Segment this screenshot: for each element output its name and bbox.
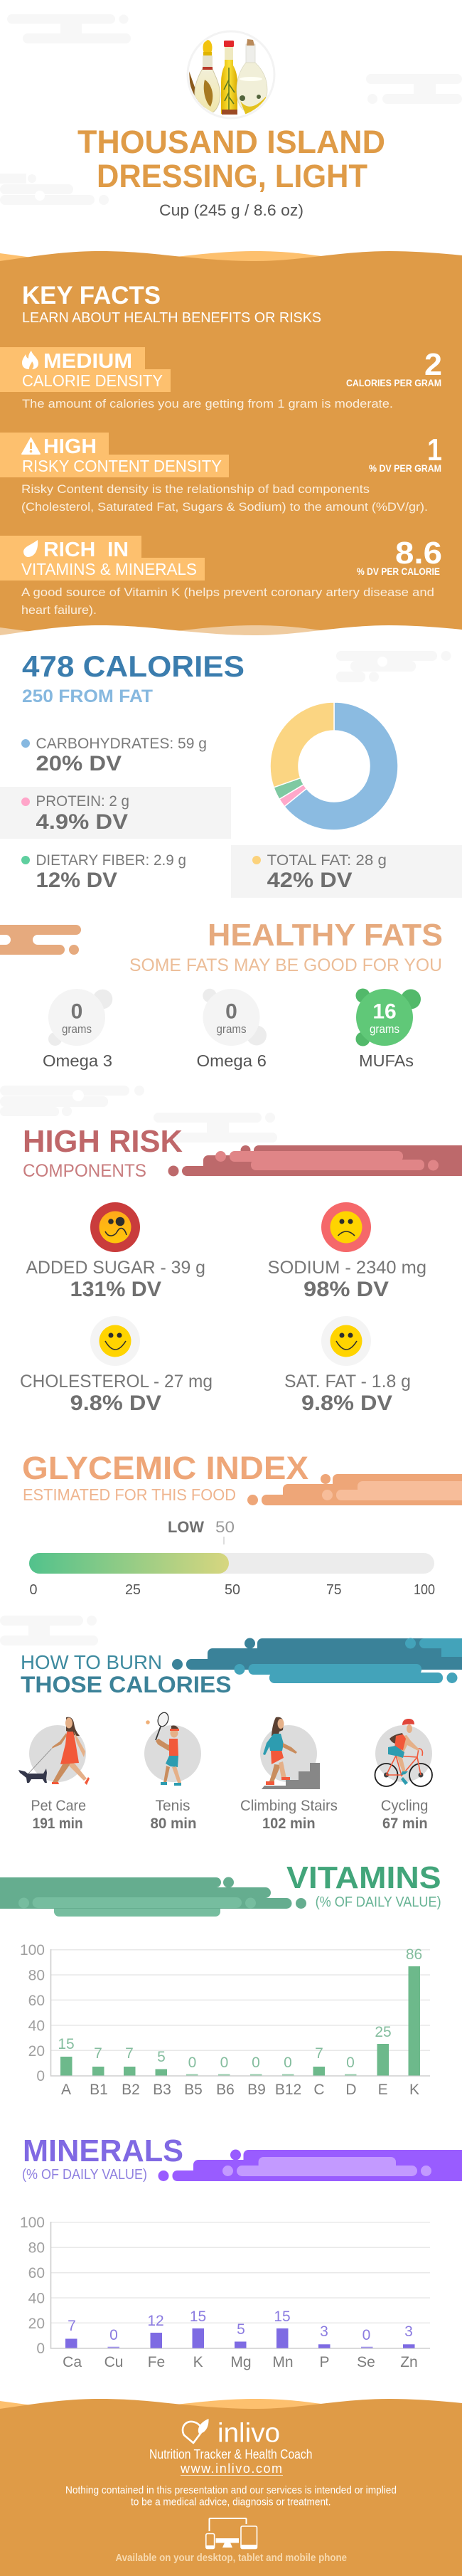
bar chart: minerals: Cu bbox=[104, 2354, 123, 2370]
bar chart: minerals: 5 bbox=[237, 2321, 245, 2338]
activity: climbing stairs bbox=[240, 1717, 338, 1832]
icon: devices bbox=[206, 2518, 257, 2548]
metric: MUFAs: MUFAs bbox=[359, 1051, 414, 1070]
bar chart: vitamins: 86 bbox=[406, 1946, 422, 1963]
metric: MUFAs: 16 bbox=[372, 1000, 397, 1023]
legend: carbohydrates: CARBOHYDRATES: 59 g bbox=[36, 736, 207, 752]
legend: carbohydrates: 20% DV bbox=[36, 752, 122, 775]
activity: tennis: Tenis bbox=[155, 1798, 190, 1814]
panel: glycemic index bbox=[22, 1450, 462, 1598]
availability note: Available on your desktop, tablet and mobile phone bbox=[115, 2552, 347, 2564]
icon: warning triangle bbox=[21, 437, 41, 455]
bar chart: vitamins: 0 bbox=[36, 2068, 45, 2084]
metric: omega 3: Omega 3 bbox=[43, 1051, 112, 1070]
activity: cycling: 67 min bbox=[382, 1816, 428, 1832]
fact: calorie density: The amount of calories you are getting from 1 gram is moderate. bbox=[22, 397, 393, 410]
fact: rich in vitamins and minerals: heart failure). bbox=[21, 603, 97, 617]
icon: flame bbox=[22, 351, 38, 369]
bar chart: minerals: P bbox=[319, 2354, 330, 2370]
bar chart: minerals: 40 bbox=[28, 2291, 45, 2306]
bar chart: minerals: 15 bbox=[190, 2309, 206, 2325]
bar chart: vitamins: 7 bbox=[125, 2045, 134, 2062]
healthy fats heading: HEALTHY FATS bbox=[208, 918, 443, 953]
legend: dietary fiber: 12% DV bbox=[36, 869, 117, 892]
glycemic value label bbox=[168, 1518, 235, 1544]
disclaimer bbox=[65, 2484, 397, 2508]
calories heading: 478 CALORIES bbox=[22, 650, 245, 683]
food photo: oil and dressing bottles in round frame bbox=[188, 31, 274, 120]
bar chart: vitamins: A bbox=[61, 2082, 71, 2098]
glycemic scale: 0 bbox=[30, 1582, 37, 1598]
disclaimer: Nothing contained in this presentation and our services is intended or implied bbox=[65, 2484, 397, 2496]
activity: pet care bbox=[18, 1717, 90, 1832]
panel: minerals bbox=[20, 2134, 462, 2370]
legend: total fat: 42% DV bbox=[267, 869, 353, 892]
fact: rich in vitamins and minerals: A good source of Vitamin K (helps prevent coronary artery disease and bbox=[21, 585, 434, 599]
decorative cloud: vitamins bbox=[0, 1877, 306, 1917]
risk: cholesterol bbox=[20, 1316, 213, 1415]
minerals subheading: (% OF DAILY VALUE) bbox=[22, 2167, 147, 2183]
bar chart: minerals: 80 bbox=[28, 2240, 45, 2257]
activity: pet care: Pet Care bbox=[31, 1798, 86, 1814]
fact: risky content density: 1 bbox=[427, 433, 442, 467]
risk: saturated fat: SAT. FAT - 1.8 g bbox=[284, 1372, 411, 1392]
bar chart: vitamins: E bbox=[378, 2082, 388, 2098]
bar chart: minerals: Fe bbox=[148, 2354, 165, 2370]
fact: risky content density: Risky Content density is the relationship of bad components bbox=[21, 482, 370, 496]
risk: added sugar: ADDED SUGAR - 39 g bbox=[26, 1258, 205, 1278]
glycemic scale bbox=[30, 1582, 435, 1598]
bar chart: vitamins: B1 bbox=[90, 2082, 108, 2098]
icon: inlivo heart logo bbox=[183, 2419, 209, 2443]
activity: tennis bbox=[144, 1711, 201, 1832]
activity: climbing stairs: 102 min bbox=[262, 1816, 316, 1832]
panel: healthy fats bbox=[0, 918, 443, 1070]
high risk heading: HIGH RISK bbox=[23, 1124, 183, 1159]
activity: cycling: Cycling bbox=[381, 1798, 428, 1814]
risk: sodium bbox=[267, 1202, 426, 1301]
bar chart: vitamins: 15 bbox=[58, 2036, 75, 2052]
panel: key facts bbox=[0, 251, 462, 639]
bar chart: vitamins: 7 bbox=[315, 2045, 323, 2062]
bar chart: minerals: K bbox=[193, 2354, 203, 2370]
bar chart: vitamins: 25 bbox=[375, 2024, 392, 2040]
bar chart: minerals: 3 bbox=[404, 2323, 413, 2340]
bar chart: vitamins: 60 bbox=[28, 1993, 45, 2009]
title: THOUSAND ISLAND bbox=[77, 124, 385, 160]
bar chart: minerals: 0 bbox=[109, 2327, 118, 2343]
tagline: Nutrition Tracker & Health Coach bbox=[149, 2447, 313, 2461]
legend: carbohydrates bbox=[21, 736, 207, 775]
bar chart: vitamins: 0 bbox=[252, 2055, 260, 2071]
bar chart: minerals: 60 bbox=[28, 2265, 45, 2281]
activity: climbing stairs: Climbing Stairs bbox=[240, 1798, 338, 1814]
metric: omega 6: Omega 6 bbox=[196, 1051, 267, 1070]
bar chart: vitamins: B9 bbox=[247, 2082, 266, 2098]
metric: MUFAs bbox=[355, 989, 421, 1070]
bar chart: vitamins: 0 bbox=[188, 2055, 196, 2071]
metric: omega 6 bbox=[196, 989, 267, 1070]
key facts heading: KEY FACTS bbox=[22, 282, 161, 309]
bar chart: minerals: 0 bbox=[362, 2327, 370, 2343]
decorative cloud: above burn bbox=[0, 1616, 98, 1645]
fact: risky content density: HIGH bbox=[43, 435, 97, 458]
fact: calorie density: 2 bbox=[424, 347, 442, 382]
bar chart: minerals: 7 bbox=[68, 2318, 76, 2334]
bar chart: minerals: 12 bbox=[147, 2313, 164, 2329]
fact: calorie density bbox=[0, 347, 442, 410]
brand name: inlivo bbox=[217, 2419, 280, 2449]
activity: pet care: 191 min bbox=[33, 1816, 83, 1832]
bar chart: vitamins: 40 bbox=[28, 2018, 45, 2035]
donut chart: macronutrients bbox=[270, 702, 398, 830]
fact: rich in vitamins and minerals bbox=[0, 536, 442, 617]
key facts subheading: LEARN ABOUT HEALTH BENEFITS OR RISKS bbox=[22, 310, 321, 326]
fact: risky content density bbox=[0, 433, 442, 514]
disclaimer: to be a medical advice, diagnosis or treatment. bbox=[131, 2496, 331, 2508]
bar chart: vitamins: B3 bbox=[153, 2082, 171, 2098]
bar chart: vitamins: C bbox=[313, 2082, 325, 2098]
fact: calorie density: CALORIES PER GRAM bbox=[346, 378, 441, 388]
burn heading: HOW TO BURN bbox=[21, 1651, 162, 1673]
fact: risky content density: % DV PER GRAM bbox=[369, 463, 441, 474]
risk: saturated fat bbox=[284, 1316, 411, 1415]
glycemic scale: 100 bbox=[414, 1582, 435, 1598]
activity: cycling bbox=[375, 1719, 432, 1832]
bar chart: minerals: 20 bbox=[28, 2316, 45, 2332]
bar chart: minerals: Ca bbox=[63, 2354, 82, 2370]
footer bbox=[0, 2399, 462, 2576]
risk: saturated fat: 9.8% DV bbox=[301, 1392, 392, 1415]
bar chart: minerals: Se bbox=[357, 2354, 375, 2370]
decorative cloud: high risk bbox=[168, 1145, 462, 1177]
legend: dietary fiber: DIETARY FIBER: 2.9 g bbox=[36, 852, 186, 869]
bar chart: vitamins: D bbox=[345, 2082, 357, 2098]
bar chart: vitamins: 7 bbox=[94, 2045, 102, 2062]
metric: omega 6: grams bbox=[216, 1022, 246, 1036]
metric: omega 3 bbox=[43, 989, 112, 1070]
legend: total fat: TOTAL FAT: 28 g bbox=[267, 852, 387, 869]
fact: risky content density: RISKY CONTENT DENSITY bbox=[22, 457, 222, 475]
decorative cloud: calories bbox=[336, 651, 451, 682]
risk: added sugar bbox=[26, 1202, 205, 1301]
decorative cloud: burn bbox=[172, 1638, 462, 1683]
icon: leaf bbox=[23, 540, 38, 557]
metric: omega 3: 0 bbox=[71, 1000, 82, 1023]
bar chart: vitamins: B6 bbox=[216, 2082, 235, 2098]
glycemic scale: 50 bbox=[225, 1582, 240, 1598]
risk: cholesterol: CHOLESTEROL - 27 mg bbox=[20, 1372, 213, 1392]
fact: rich in vitamins and minerals: RICH IN bbox=[43, 539, 129, 561]
vitamins subheading: (% OF DAILY VALUE) bbox=[316, 1894, 441, 1910]
title bbox=[77, 124, 385, 194]
legend: protein bbox=[0, 787, 231, 839]
glycemic gauge bar bbox=[29, 1553, 434, 1574]
vitamins heading: VITAMINS bbox=[286, 1860, 441, 1895]
website link: www.inlivo.com bbox=[180, 2461, 282, 2476]
panel: high risk components bbox=[20, 1124, 462, 1415]
decorative clouds: above high risk bbox=[0, 1086, 277, 1143]
bar chart: vitamins: 0 bbox=[220, 2055, 228, 2071]
bar chart: vitamins bbox=[20, 1942, 430, 2098]
bar chart: minerals: 0 bbox=[36, 2341, 45, 2357]
bar chart: vitamins: 5 bbox=[157, 2049, 166, 2065]
decorative cloud: healthy fats bbox=[0, 925, 81, 955]
legend: protein: PROTEIN: 2 g bbox=[36, 793, 129, 810]
metric: omega 6: 0 bbox=[225, 1000, 237, 1023]
bar chart: vitamins: 100 bbox=[20, 1942, 45, 1958]
bar chart: vitamins: 0 bbox=[346, 2055, 355, 2071]
glycemic heading: GLYCEMIC INDEX bbox=[22, 1450, 308, 1486]
glycemic scale: 75 bbox=[326, 1582, 341, 1598]
legend: protein: 4.9% DV bbox=[36, 810, 128, 834]
bar chart: vitamins: 20 bbox=[28, 2043, 45, 2060]
panel: vitamins bbox=[0, 1860, 441, 2098]
glycemic scale: 25 bbox=[125, 1582, 141, 1598]
bar chart: minerals: 3 bbox=[320, 2323, 328, 2340]
bar chart: vitamins: 80 bbox=[28, 1968, 45, 1983]
bar chart: minerals: 100 bbox=[20, 2215, 45, 2231]
fact: calorie density: CALORIE DENSITY bbox=[22, 371, 163, 390]
glycemic value label: LOW bbox=[168, 1518, 204, 1536]
risk: sodium: 98% DV bbox=[303, 1278, 389, 1301]
fact: risky content density: (Cholesterol, Saturated Fat, Sugars & Sodium) to the amount (%DV/gr). bbox=[21, 500, 428, 514]
fact: rich in vitamins and minerals: % DV PER CALORIE bbox=[357, 566, 440, 577]
panel: how to burn: THOSE CALORIES bbox=[21, 1672, 232, 1697]
bar chart: vitamins: B2 bbox=[122, 2082, 140, 2098]
healthy fats subheading: SOME FATS MAY BE GOOD FOR YOU bbox=[129, 955, 442, 975]
glycemic value label: 50 bbox=[215, 1518, 235, 1536]
bar chart: minerals: Zn bbox=[400, 2354, 418, 2370]
metric: omega 3: grams bbox=[62, 1022, 92, 1036]
bar chart: vitamins: B5 bbox=[184, 2082, 203, 2098]
decorative cloud: minerals bbox=[158, 2150, 462, 2181]
legend: total fat bbox=[231, 845, 462, 898]
legend: dietary fiber bbox=[21, 852, 186, 892]
bar chart: minerals: 15 bbox=[274, 2309, 291, 2325]
bar chart: vitamins: K bbox=[409, 2082, 419, 2098]
activity: tennis: 80 min bbox=[151, 1816, 196, 1832]
bar chart: vitamins: B12 bbox=[275, 2082, 301, 2098]
high risk subheading: COMPONENTS bbox=[23, 1161, 146, 1181]
minerals heading: MINERALS bbox=[23, 2134, 183, 2168]
glycemic subheading: ESTIMATED FOR THIS FOOD bbox=[23, 1485, 236, 1504]
bar chart: minerals: Mn bbox=[272, 2354, 294, 2370]
risk: sodium: SODIUM - 2340 mg bbox=[267, 1258, 426, 1278]
panel: calories bbox=[0, 650, 462, 898]
title: DRESSING, LIGHT bbox=[97, 158, 367, 194]
metric: MUFAs: grams bbox=[370, 1022, 399, 1036]
bar chart: minerals: Mg bbox=[230, 2354, 252, 2370]
decorative clouds: header bbox=[0, 14, 462, 205]
fact: calorie density: MEDIUM bbox=[43, 350, 132, 373]
panel: how to burn bbox=[18, 1638, 462, 1832]
risk: cholesterol: 9.8% DV bbox=[70, 1392, 161, 1415]
decorative cloud: glycemic bbox=[247, 1474, 462, 1505]
serving size: Cup (245 g / 8.6 oz) bbox=[159, 201, 303, 219]
calories from fat: 250 FROM FAT bbox=[22, 687, 153, 706]
risk: added sugar: 131% DV bbox=[70, 1278, 161, 1301]
bar chart: minerals bbox=[20, 2215, 430, 2370]
fact: rich in vitamins and minerals: 8.6 bbox=[395, 536, 442, 571]
bar chart: vitamins: 0 bbox=[284, 2055, 292, 2071]
fact: rich in vitamins and minerals: VITAMINS & MINERALS bbox=[21, 560, 197, 578]
